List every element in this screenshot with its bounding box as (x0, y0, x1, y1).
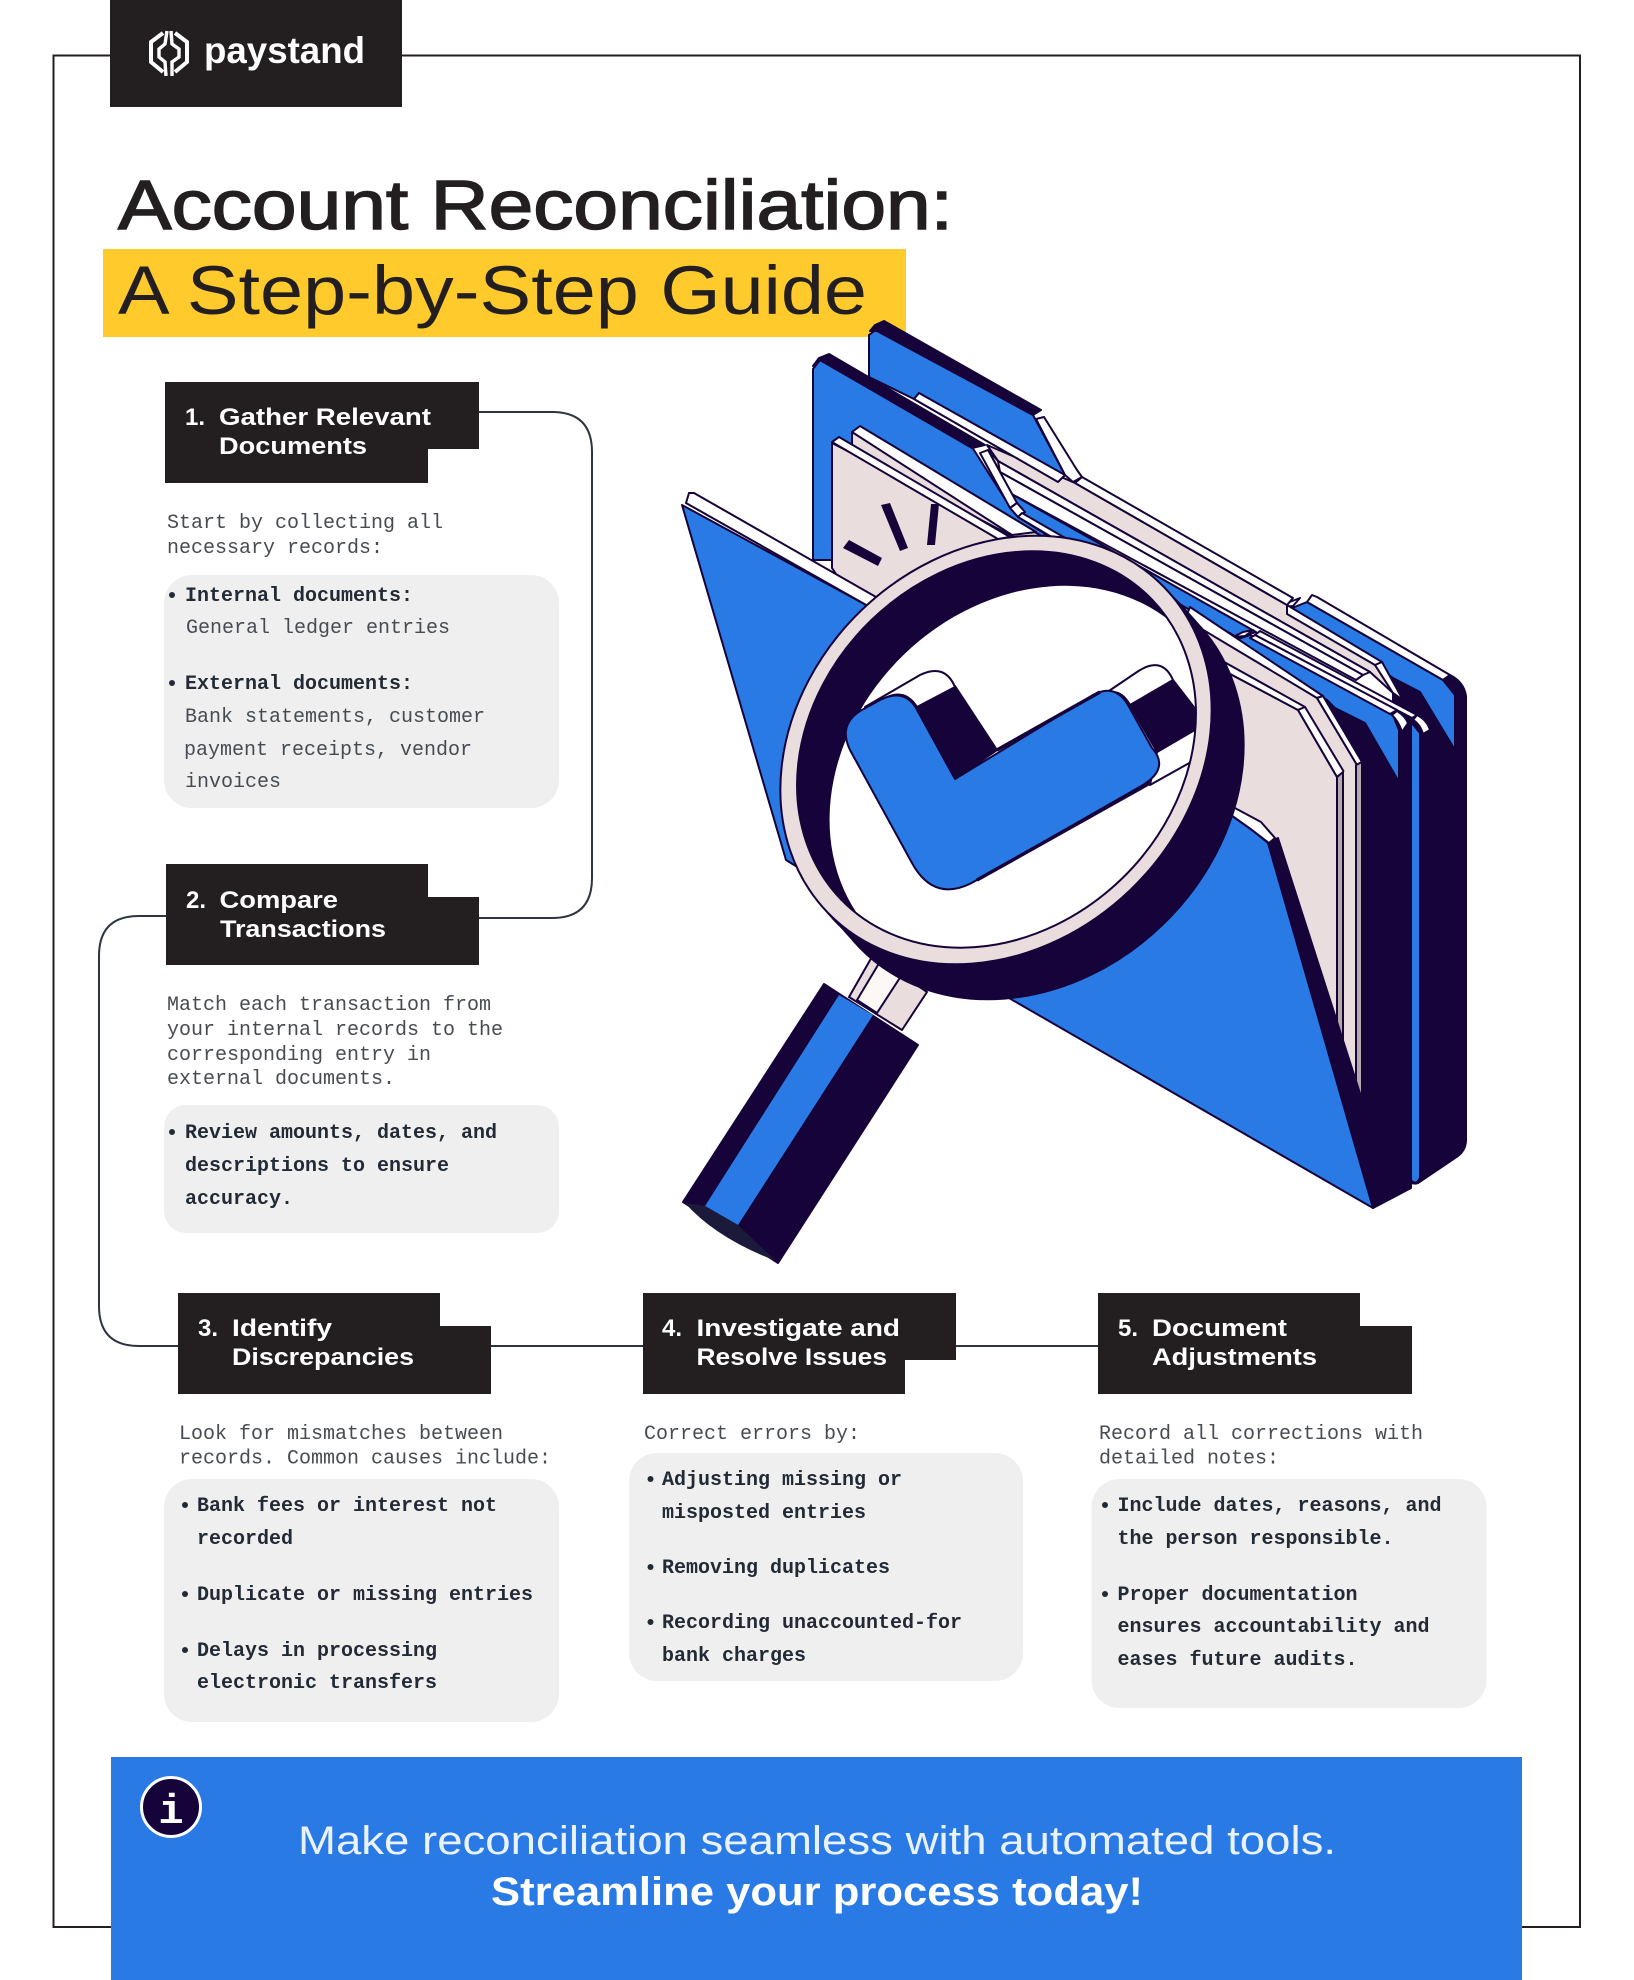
panel: step 2 review (164, 1105, 559, 1233)
panel: step 2 review: descriptions to ensure (185, 1155, 449, 1178)
panel: step 2 review: accuracy. (185, 1188, 293, 1211)
logo wordmark: paystand (204, 30, 365, 71)
intro text: step 5: detailed notes: (1099, 1448, 1279, 1470)
step 2 (164, 864, 559, 1233)
panel: step 3 causes: recorded (197, 1528, 293, 1551)
title: A Step-by-Step Guide (118, 252, 867, 329)
heading: step 5: Document (1152, 1315, 1287, 1342)
panel: step 3 causes (164, 1479, 559, 1722)
panel: step 3 causes: Duplicate or missing entries (197, 1584, 533, 1607)
sunburst ticks (843, 503, 939, 566)
panel: step 4 corrections: Adjusting missing or (662, 1469, 902, 1492)
panel: step 5 documentation: Proper documentation (1118, 1584, 1358, 1607)
intro text: step 4: Correct errors by: (644, 1423, 860, 1446)
footer text: Streamline your process today! (491, 1870, 1143, 1914)
intro text: step 2: Match each transaction from (167, 994, 491, 1017)
title (103, 166, 953, 337)
rear folder (869, 321, 1466, 1184)
icon: paystand mark (151, 31, 187, 76)
heading: step 4 (643, 1293, 956, 1394)
intro text: step 3: Look for mismatches between (179, 1423, 503, 1446)
middle folder (813, 354, 1430, 1208)
panel: step 4 corrections: Removing duplicates (662, 1557, 890, 1580)
heading: step 3: Identify (232, 1315, 333, 1342)
panel: step 1 documents (164, 575, 559, 808)
panel: step 4 corrections (629, 1453, 1023, 1681)
intro text: step 3: records. Common causes include: (179, 1448, 551, 1470)
heading: step 1: Documents (219, 433, 367, 460)
heading: step 2: Compare (220, 887, 338, 914)
heading: step 4: Investigate and (696, 1315, 900, 1342)
panel: step 1 documents: General ledger entries (186, 617, 450, 640)
panel: step 3 causes: electronic transfers (197, 1672, 437, 1695)
panel: step 3 causes: Delays in processing (197, 1640, 437, 1663)
intro text: step 5: Record all corrections with (1099, 1423, 1423, 1446)
rear paper band (914, 393, 1403, 700)
intro text: step 3 (179, 1423, 551, 1470)
papers (832, 426, 1362, 1112)
heading: step 1: Gather Relevant (219, 404, 431, 431)
heading: step 4: 4. (662, 1315, 682, 1342)
panel: step 1 documents: payment receipts, vendor (184, 739, 472, 762)
intro text: step 1 (167, 512, 443, 560)
heading: step 2 (166, 864, 479, 965)
heading: step 2: Transactions (220, 916, 386, 943)
panel: step 4 corrections: misposted entries (662, 1502, 866, 1525)
title: Account Reconciliation: (118, 166, 953, 244)
panel: step 1 documents: Bank statements, customer (185, 706, 485, 729)
footer banner (111, 1757, 1522, 1980)
magnifying glass lens (779, 534, 1245, 1000)
panel: step 3 causes: Bank fees or interest not (197, 1495, 497, 1518)
heading: step 1: 1. (185, 404, 205, 431)
intro text: step 5 (1099, 1423, 1423, 1470)
checkmark (846, 665, 1200, 889)
intro text: step 1: Start by collecting all (167, 512, 443, 535)
icon: info: i (158, 1788, 184, 1836)
step 1 (164, 382, 559, 808)
panel: step 4 corrections: bank charges (662, 1645, 806, 1668)
intro text: step 2: external documents. (167, 1068, 395, 1091)
panel: step 5 documentation: Include dates, reasons, and (1118, 1495, 1442, 1518)
panel: step 5 documentation: ensures accountability and (1118, 1616, 1430, 1639)
heading: step 2: 2. (186, 887, 206, 914)
heading: step 1 (165, 382, 479, 483)
intro text: step 2: corresponding entry in (167, 1044, 431, 1067)
heading: step 3 (178, 1293, 491, 1394)
intro text: step 2: your internal records to the (167, 1019, 503, 1042)
intro text: step 1: necessary records: (167, 537, 383, 560)
panel: step 5 documentation: eases future audits. (1118, 1649, 1358, 1672)
heading: step 5: Adjustments (1152, 1344, 1317, 1371)
heading: step 5: 5. (1118, 1315, 1138, 1342)
footer text (298, 1819, 1336, 1914)
step 3 (164, 1293, 559, 1722)
panel: step 5 documentation: the person responsible. (1118, 1528, 1394, 1551)
connector lines between steps (99, 412, 1098, 1346)
panel: step 1 documents: Internal documents: (185, 585, 413, 608)
heading: step 4: Resolve Issues (696, 1344, 887, 1371)
footer text: Make reconciliation seamless with automated tools. (298, 1819, 1336, 1863)
heading: step 5 (1098, 1293, 1412, 1394)
icon: info (142, 1778, 200, 1836)
panel: step 2 review: Review amounts, dates, and (185, 1122, 497, 1145)
step 5 (1092, 1293, 1486, 1708)
heading: step 3: 3. (198, 1315, 218, 1342)
panel: step 5 documentation (1092, 1479, 1486, 1708)
logo: paystand (110, 0, 402, 107)
intro text: step 2 (167, 994, 503, 1091)
panel: step 1 documents: invoices (185, 771, 281, 794)
heading: step 3: Discrepancies (232, 1344, 414, 1371)
illustration: folders with magnifying glass and checkmark (682, 321, 1466, 1263)
magnifying glass handle (683, 955, 927, 1263)
panel: step 4 corrections: Recording unaccounted-for (662, 1612, 962, 1635)
step 4 (629, 1293, 1023, 1681)
front folder panel (682, 493, 1373, 1208)
panel: step 1 documents: External documents: (185, 673, 413, 696)
